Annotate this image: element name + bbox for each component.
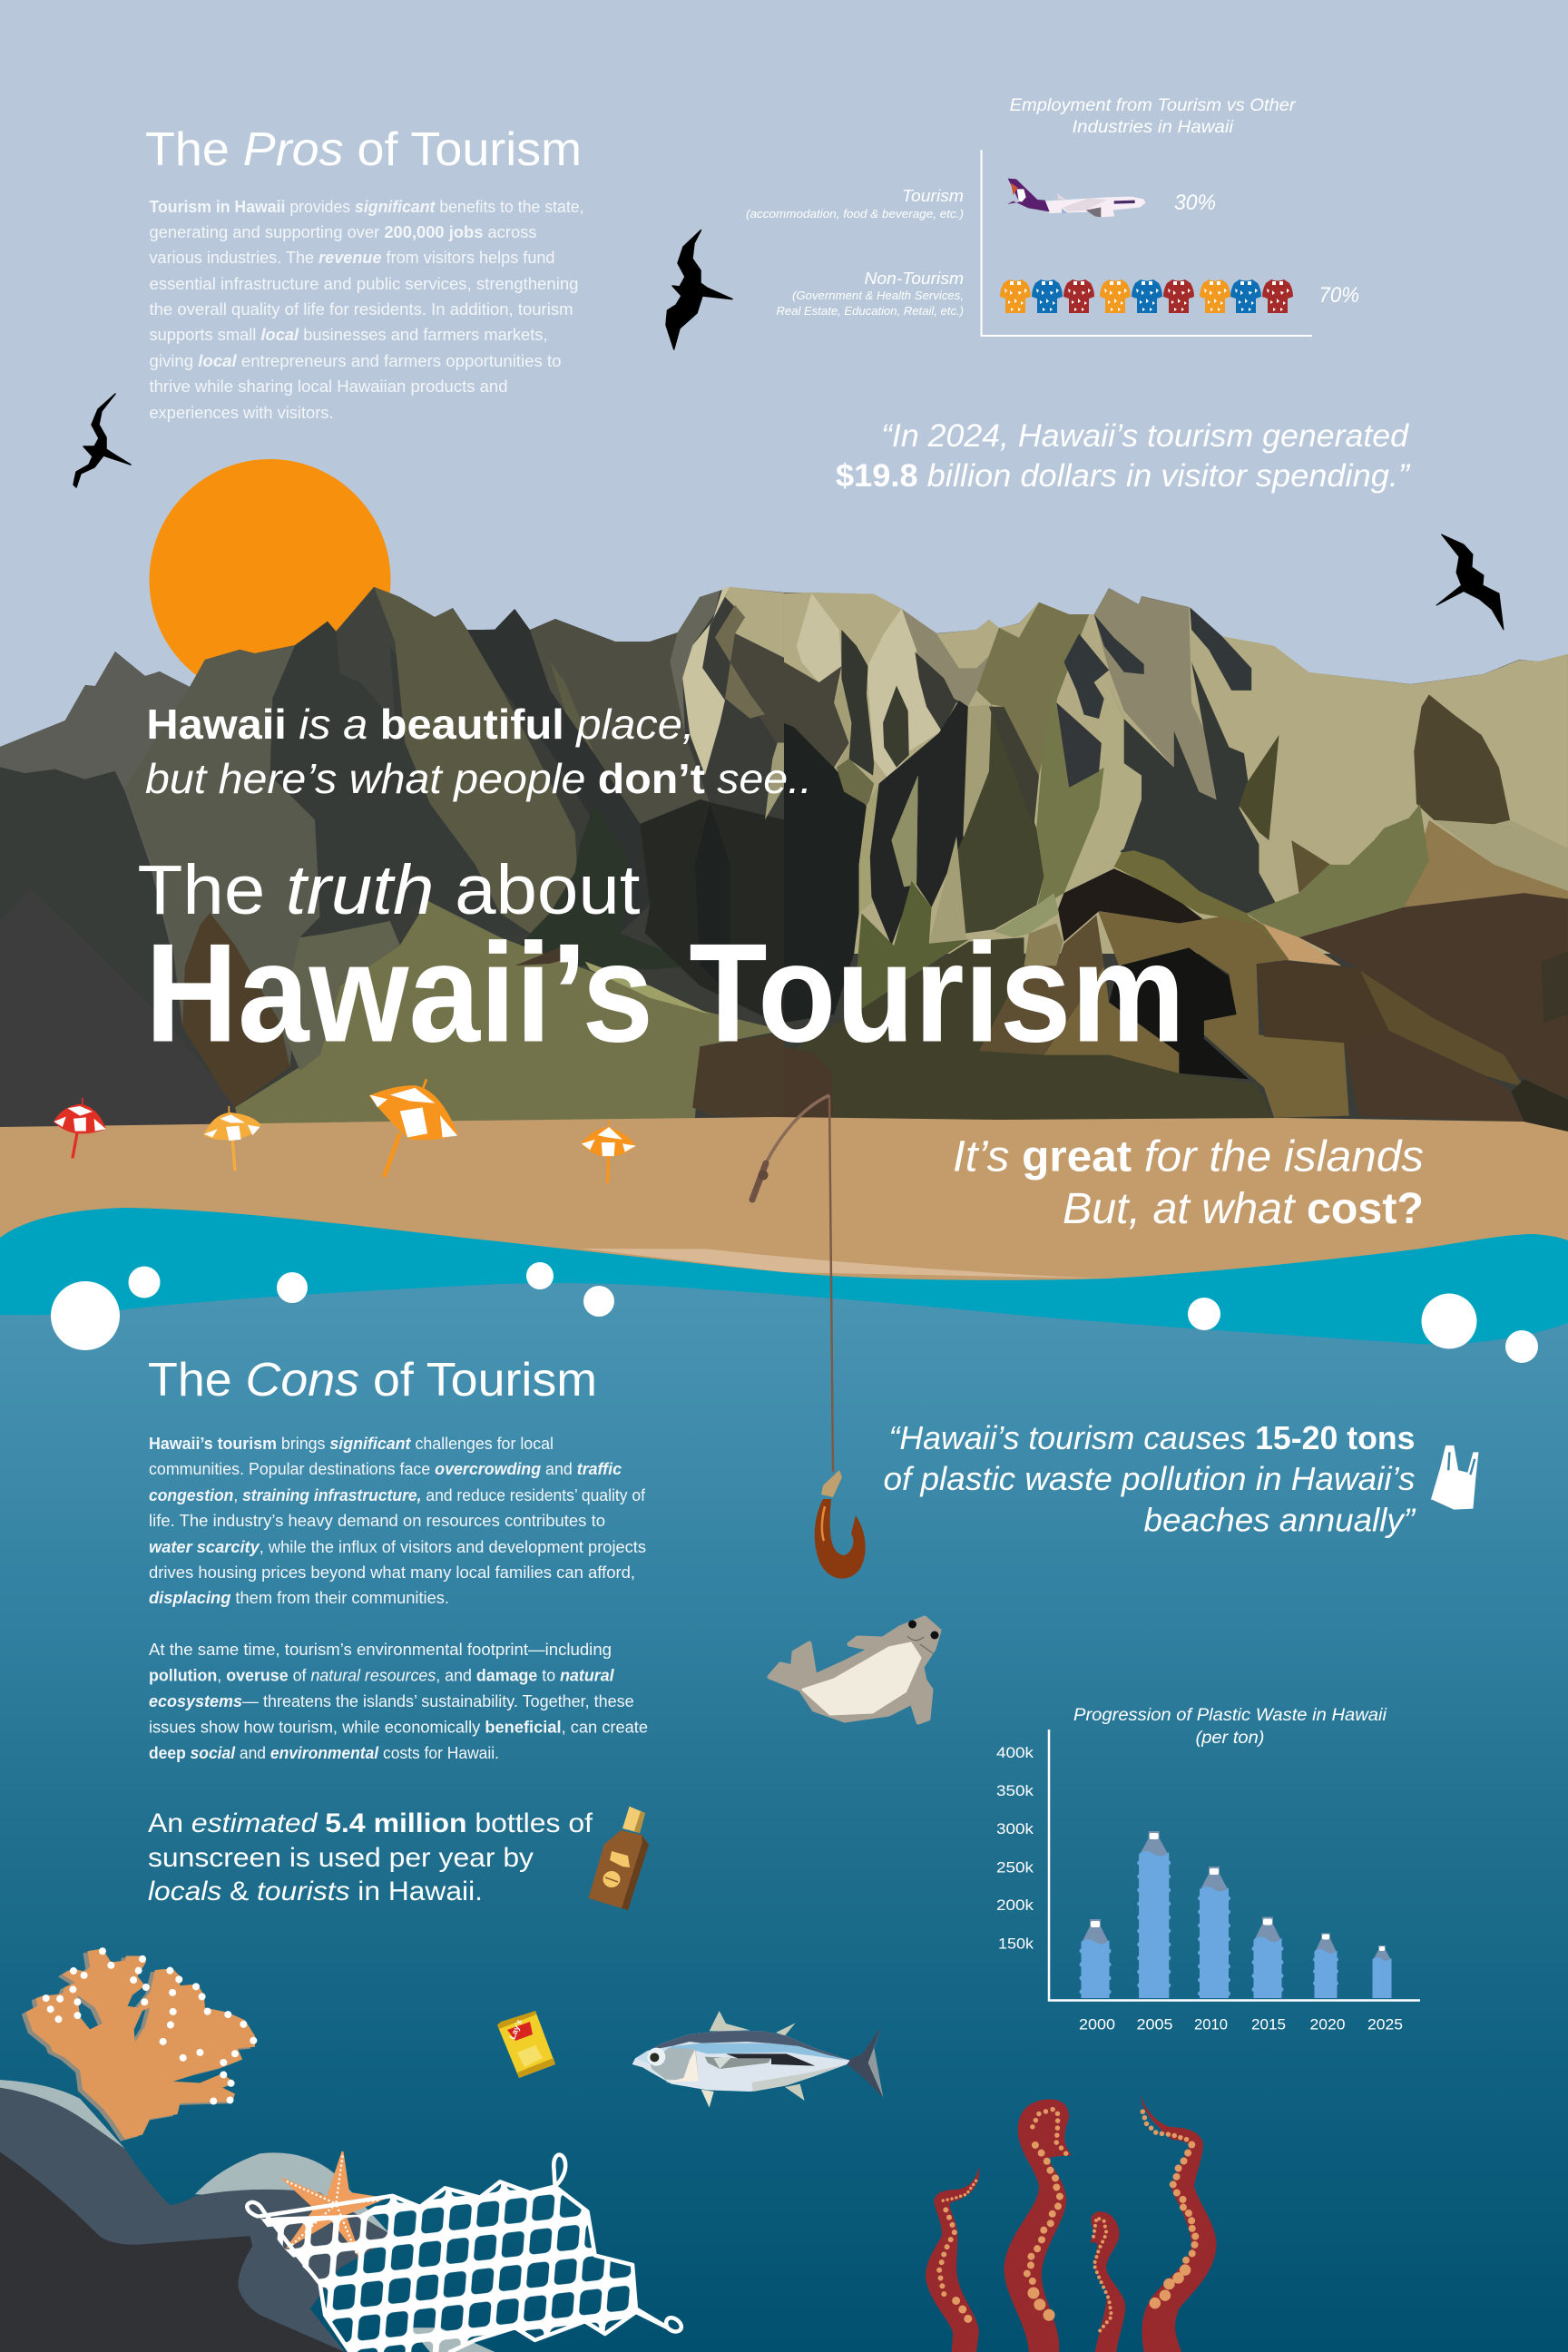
bottle bar: 2000 <box>1082 1919 1109 1998</box>
panel: cons of tourism <box>148 1354 648 1762</box>
main title <box>138 851 1185 1071</box>
icon: airplane <box>1007 179 1146 217</box>
beach umbrellas <box>54 1079 636 1183</box>
main title: The truth about <box>138 851 641 929</box>
stat: sunscreen bottles: locals & tourists in Hawaii. <box>148 1877 483 1906</box>
tentacle two <box>1004 2099 1072 2352</box>
icon: fishing net <box>247 2155 681 2352</box>
sun <box>149 459 390 701</box>
value: 30%: 30% <box>1174 191 1216 215</box>
cons body paragraph one: life. The industry’s heavy demand on resources contributes to <box>149 1511 605 1530</box>
icon row: aloha shirts <box>1000 279 1293 313</box>
cons body paragraph one <box>149 1434 646 1607</box>
tentacle one <box>926 2166 979 2352</box>
cons body paragraph one: communities. Popular destinations face overcrowding and traffic <box>149 1459 622 1478</box>
fishing rod and line <box>752 1095 833 1472</box>
closing question: It’s great for the islands <box>953 1132 1424 1181</box>
icon: coral <box>22 1948 255 2141</box>
icon: sunscreen bottle <box>588 1807 649 1910</box>
quote: visitor spending: “In 2024, Hawaii’s tourism generated <box>881 418 1410 454</box>
bottle bar: 2010 <box>1200 1867 1229 1998</box>
y axis labels: 200k <box>996 1896 1034 1914</box>
stat: sunscreen bottles: sunscreen is used per year by <box>148 1843 534 1873</box>
chart axes <box>1049 1730 1420 2000</box>
bird top centre <box>666 230 732 349</box>
pros body text <box>149 197 584 422</box>
closing question: But, at what cost? <box>1063 1185 1424 1233</box>
category label: non-tourism: (Government & Health Services, <box>792 289 964 302</box>
x axis labels: 2020 <box>1310 2016 1345 2033</box>
cons body paragraph one: Hawaii’s tourism brings significant challenges for local <box>149 1434 554 1453</box>
pros body text: the overall quality of life for residents. In addition, tourism <box>149 299 573 318</box>
stat: sunscreen bottles: An estimated 5.4 million bottles of <box>148 1808 593 1838</box>
stat: sunscreen bottles <box>148 1808 593 1906</box>
cons body paragraph two: ecosystems— threatens the islands’ sustainability. Together, these <box>149 1691 634 1710</box>
y axis labels: 400k <box>996 1744 1034 1761</box>
x axis labels: 2015 <box>1251 2016 1286 2033</box>
bottle bar: 2015 <box>1254 1916 1281 1998</box>
bottle bar: 2025 <box>1372 1945 1392 1998</box>
heading: cons: The Cons of Tourism <box>148 1354 597 1406</box>
cons body paragraph two: At the same time, tourism’s environmental footprint—including <box>149 1640 612 1659</box>
panel: pros of tourism <box>145 123 584 422</box>
cons body paragraph one: displacing them from their communities. <box>149 1588 449 1607</box>
cons body paragraph two <box>149 1640 648 1762</box>
bird left <box>74 394 131 487</box>
chart title: Employment from Tourism vs Other <box>1010 96 1296 115</box>
category label: tourism <box>746 187 964 220</box>
x axis labels <box>1079 2016 1403 2033</box>
icon: monk seal <box>769 1618 939 1722</box>
y axis labels: 300k <box>996 1820 1034 1838</box>
pros body text: essential infrastructure and public services, strengthening <box>149 274 579 293</box>
cons body paragraph two: pollution, overuse of natural resources, and damage to natural <box>149 1666 614 1684</box>
octopus tentacles <box>926 2094 1217 2352</box>
cons body paragraph one: drives housing prices beyond what many local families can afford, <box>149 1563 635 1582</box>
subtitle: beautiful place: but here’s what people don’t see.. <box>145 755 812 802</box>
y axis labels: 150k <box>998 1935 1034 1953</box>
x axis labels: 2025 <box>1367 2016 1403 2033</box>
icon: starfish <box>282 2152 385 2257</box>
umbrella: red <box>54 1098 106 1158</box>
pros body text: experiences with visitors. <box>149 403 334 422</box>
shallow turquoise water <box>0 1208 1568 1361</box>
closing question <box>953 1132 1424 1233</box>
pros body text: Tourism in Hawaii provides significant benefits to the state, <box>149 197 584 216</box>
chart title <box>1073 1706 1387 1748</box>
chart title: Industries in Hawaii <box>1073 118 1234 137</box>
subtitle: beautiful place <box>145 701 812 802</box>
x axis labels: 2005 <box>1136 2016 1172 2033</box>
wet sand strip <box>581 1249 1108 1279</box>
pros body text: giving local entrepreneurs and farmers opportunities to <box>149 351 561 370</box>
icon: fish hook <box>815 1470 866 1579</box>
y axis labels: 350k <box>996 1782 1034 1799</box>
y axis labels: 250k <box>996 1858 1034 1877</box>
category label: tourism: Tourism <box>902 187 964 205</box>
pros body text: generating and supporting over 200,000 jobs across <box>149 222 537 241</box>
category label: tourism: (accommodation, food & beverage, etc.) <box>746 208 964 220</box>
quote: visitor spending <box>836 418 1410 494</box>
bird right <box>1436 534 1504 630</box>
x axis labels: 2000 <box>1079 2016 1115 2033</box>
quote: plastic waste: beaches annually” <box>1143 1501 1416 1539</box>
tentacle four <box>1141 2094 1217 2352</box>
icon: tuna <box>632 2011 883 2108</box>
pros body text: thrive while sharing local Hawaiian products and <box>149 377 508 396</box>
chart: progression of plastic waste <box>996 1706 1420 2033</box>
chart title: Progression of Plastic Waste in Hawaii <box>1073 1706 1387 1725</box>
category label: non-tourism <box>777 270 964 318</box>
chart axes <box>982 150 1312 336</box>
umbrella: small orange <box>581 1120 636 1183</box>
main title: Hawaii’s Tourism <box>145 915 1185 1071</box>
tentacle three <box>1090 2211 1125 2352</box>
heading: pros: The Pros of Tourism <box>145 123 582 176</box>
deep ocean <box>0 1283 1568 2352</box>
cons body paragraph one: water scarcity, while the influx of visitors and development projects <box>149 1537 646 1556</box>
cons body paragraph one: congestion, straining infrastructure, and reduce residents’ quality of <box>149 1485 646 1504</box>
quote: visitor spending: $19.8 billion dollars in visitor spending.” <box>836 458 1410 494</box>
quote: plastic waste <box>884 1419 1416 1539</box>
value: 70%: 70% <box>1319 283 1359 308</box>
umbrella: large orange <box>369 1079 457 1177</box>
subtitle: beautiful place: Hawaii is a beautiful place, <box>146 701 694 748</box>
pros body text: supports small local businesses and farmers markets, <box>149 325 548 344</box>
mountain range <box>0 587 1568 1152</box>
bubbles <box>51 1262 1538 1363</box>
quote: plastic waste: “Hawaii’s tourism causes 15-20 tons <box>889 1419 1416 1456</box>
bottle bar: 2020 <box>1314 1933 1338 1998</box>
cons body paragraph two: deep social and environmental costs for Hawaii. <box>149 1743 499 1762</box>
rocks on sea floor <box>0 2080 495 2352</box>
chart title <box>1010 96 1296 137</box>
y axis labels <box>996 1744 1034 1953</box>
icon: plastic bag <box>1431 1446 1478 1510</box>
quote: plastic waste: of plastic waste pollution in Hawaii’s <box>884 1460 1416 1497</box>
pros body text: various industries. The revenue from visitors helps fund <box>149 248 555 267</box>
bottle bar: 2005 <box>1139 1831 1169 1998</box>
umbrella: light orange <box>203 1106 261 1171</box>
beach sand <box>0 1117 1568 1361</box>
cons body paragraph two: issues show how tourism, while economically beneficial, can create <box>149 1717 648 1737</box>
x axis labels: 2010 <box>1194 2016 1228 2033</box>
category label: non-tourism: Non-Tourism <box>864 270 964 288</box>
category label: non-tourism: Real Estate, Education, Retail, etc.) <box>777 305 964 318</box>
icon: chip bag <box>497 2011 555 2078</box>
icon: chip bag: Lay’s <box>508 2018 524 2041</box>
chart title: (per ton) <box>1196 1729 1265 1748</box>
chart: employment from tourism vs other industries <box>746 96 1359 336</box>
